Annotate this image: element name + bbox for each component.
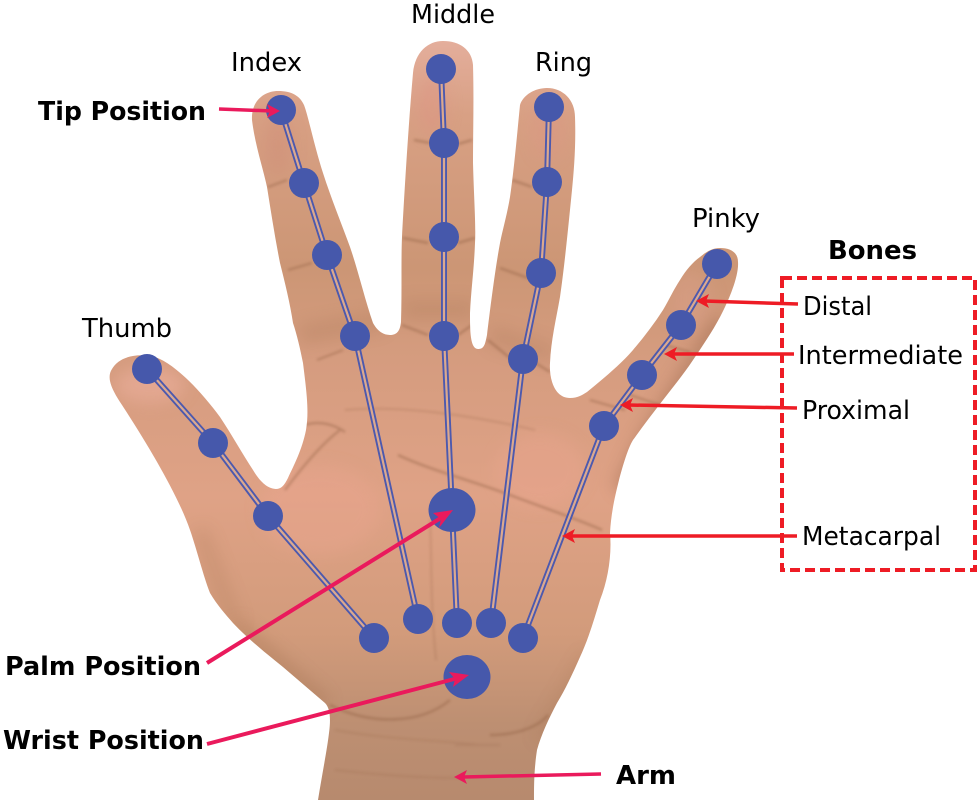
bone label: metacarpal: Metacarpal bbox=[802, 522, 941, 552]
bone label: intermediate: Intermediate bbox=[798, 341, 963, 371]
skeleton bones bbox=[147, 69, 717, 638]
callout: wrist position: Wrist Position bbox=[3, 726, 204, 756]
bones legend box bbox=[782, 236, 975, 570]
joints bbox=[132, 54, 732, 699]
bones legend box: Bones bbox=[828, 236, 917, 266]
finger labels: Middle bbox=[411, 0, 495, 30]
callout: arm: Arm bbox=[616, 761, 676, 791]
callout: tip position: Tip Position bbox=[38, 97, 206, 127]
finger labels: Thumb bbox=[81, 314, 172, 344]
bone label: proximal bbox=[620, 396, 910, 426]
callout: wrist position bbox=[3, 672, 469, 756]
callout: palm position: Palm Position bbox=[5, 652, 201, 682]
finger labels: Pinky bbox=[692, 204, 760, 234]
bone label: intermediate bbox=[664, 341, 963, 371]
bone label: distal bbox=[696, 292, 872, 322]
finger labels bbox=[81, 0, 760, 344]
callout: palm position bbox=[5, 510, 453, 682]
callout: arm bbox=[454, 761, 676, 791]
bone label: metacarpal bbox=[562, 522, 941, 552]
finger labels: Ring bbox=[535, 48, 592, 78]
bone label: proximal: Proximal bbox=[802, 396, 910, 426]
bone label: distal: Distal bbox=[803, 292, 872, 322]
finger labels: Index bbox=[231, 48, 302, 78]
hand photo silhouette bbox=[110, 41, 738, 800]
